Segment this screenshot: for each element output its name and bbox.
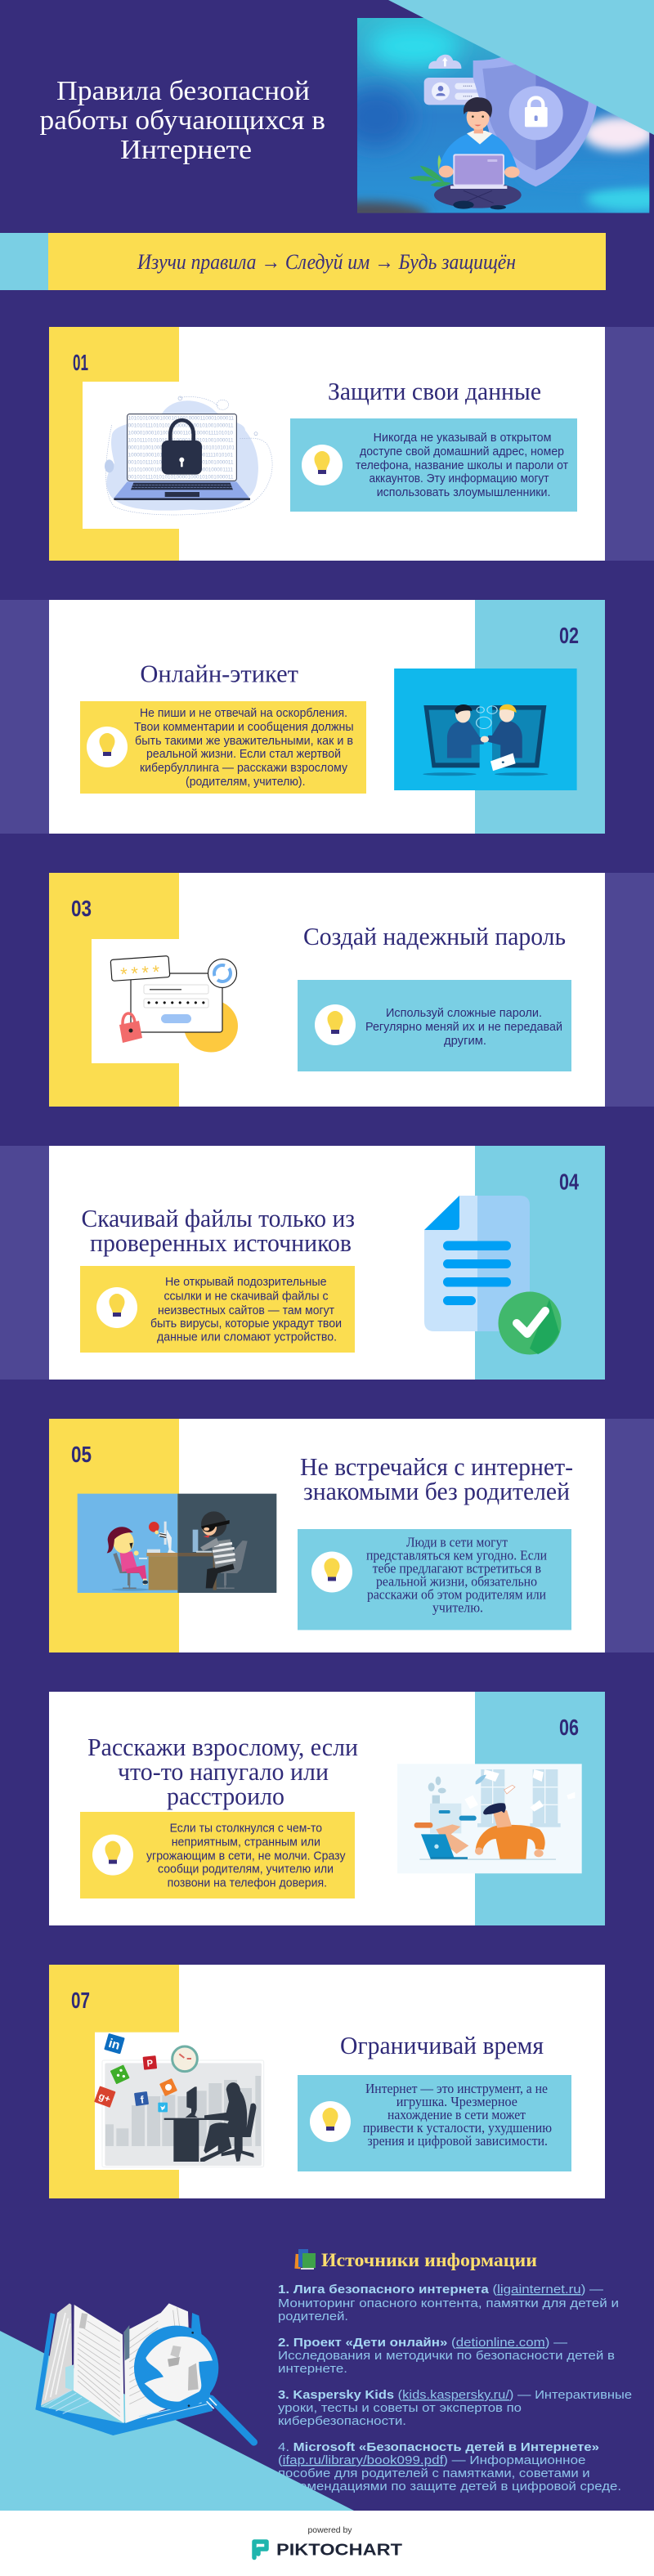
powered by text: powered by: [307, 2525, 352, 2535]
panel 3: strong password: [49, 873, 654, 1107]
footer: [0, 2511, 654, 2576]
tip text: [134, 706, 354, 789]
number 03: 03: [71, 896, 92, 921]
tip text: кибербуллинга — расскажи взрослому: [140, 761, 347, 775]
tip text: другим.: [444, 1034, 486, 1048]
tip text: данные или сломают устройство.: [157, 1330, 337, 1344]
tip text: позвони на телефон доверия.: [168, 1876, 327, 1890]
number 02: 02: [559, 623, 579, 648]
sources text: [278, 2283, 632, 2493]
icon: light bulb: [310, 2101, 351, 2142]
tip text: [356, 431, 568, 499]
heading: [300, 1452, 573, 1505]
Piktochart wordmark: PIKTOCHART: [276, 2542, 402, 2560]
panel 1: protect your data: [49, 327, 654, 561]
illustration: laptop with padlock: 1010101000010001010010000110001000011: [128, 416, 234, 422]
icon: light bulb: [315, 1004, 356, 1045]
tip text: [150, 1275, 342, 1344]
sources text: родителей.: [278, 2310, 348, 2323]
bottom left triangle: [0, 2331, 354, 2511]
icon: cloud: [428, 55, 461, 69]
panel 5: do not meet strangers: [49, 1419, 654, 1652]
tip box: [290, 418, 577, 512]
heading: [82, 1204, 355, 1257]
desk silhouette: [164, 2082, 256, 2162]
icon: shield: [473, 56, 597, 186]
tip text: неприятным, странным или: [172, 1836, 320, 1849]
tip text: расскажи об этом родителям или: [367, 1587, 546, 1602]
tip text: быть вирусы, которые украдут твои: [150, 1317, 342, 1330]
heading: Скачивай файлы только из: [82, 1204, 355, 1232]
heading: Ограничивай время: [340, 2031, 544, 2059]
icon: light bulb: [96, 1287, 137, 1328]
number 06: 06: [559, 1715, 579, 1740]
illustration: laptop with padlock: 1010111010101010100001000101001000011: [128, 438, 234, 444]
sources text: пособие для родителей с памятками, советами и: [278, 2466, 590, 2480]
hero title: Правила безопасной: [56, 76, 310, 106]
icon: light bulb: [87, 727, 128, 767]
sources text: интернете.: [278, 2362, 347, 2376]
hero illustration: boy with laptop and shield: [357, 18, 649, 213]
tip text: тебе предлагают встретиться в: [373, 1561, 541, 1576]
tagline banner: [0, 233, 606, 290]
heading: что-то напугало или: [118, 1757, 329, 1786]
tip text: Люди в сети могут: [406, 1535, 508, 1550]
heading: Не встречайся с интернет-: [300, 1452, 573, 1481]
illustration: password form: [110, 956, 238, 1053]
tip text: нахождение в сети может: [387, 2107, 526, 2122]
tip text: ссылки и не скачивай файлы с: [164, 1290, 329, 1303]
social media icons: P: [146, 2059, 154, 2069]
number 04: 04: [559, 1169, 579, 1195]
icon: document with check mark: [424, 1196, 561, 1355]
tip text: Не открывай подозрительные: [165, 1275, 327, 1289]
sources text: 2. Проект «Дети онлайн» (detionline.com ) —: [278, 2336, 567, 2350]
tip text: сообщи родителям, учителю или: [158, 1863, 334, 1876]
heading: Онлайн-этикет: [140, 659, 298, 688]
login card: •••••: [463, 84, 473, 89]
tip text: (родителям, учителю).: [186, 775, 306, 789]
icon: Piktochart logo: [254, 2542, 267, 2558]
tip text: [363, 2081, 552, 2149]
illustration: laptop with padlock: [105, 396, 272, 515]
number 01: 01: [73, 350, 88, 375]
panel 4: download files safely: [0, 1146, 605, 1380]
tip text: угрожающим в сети, не молчи. Сразу: [146, 1849, 346, 1863]
icon: stack of books: [294, 2249, 316, 2270]
person: [434, 97, 522, 209]
panel 6: tell an adult: [49, 1692, 605, 1925]
sources text: 4. Microsoft «Безопасность детей в Интернете»: [278, 2440, 599, 2454]
illustration: password form: ****: [120, 961, 161, 985]
tip text: Никогда не указывай в открытом: [374, 431, 551, 445]
tip box: [80, 1812, 355, 1898]
hero title: [39, 76, 325, 165]
tip text: привести к усталости, ухудшению: [363, 2120, 552, 2135]
tip text: неизвестных сайтов — там могут: [158, 1304, 334, 1317]
sources heading: Источники информации: [321, 2250, 537, 2270]
login card: •••••: [463, 94, 473, 99]
icon: light bulb: [92, 1835, 133, 1876]
tip text: быть такими же уважительными, как и в: [135, 734, 353, 748]
tip text: доступе свой домашний адрес, номер: [360, 445, 564, 458]
tip text: Используй сложные пароли.: [386, 1006, 542, 1020]
sources text: кибербезопасности.: [278, 2414, 406, 2428]
tip text: Если ты столкнулся с чем-то: [170, 1821, 322, 1836]
tip text: представляться кем угодно. Если: [366, 1548, 547, 1563]
illustration: person at desk with social icons: [94, 2033, 264, 2170]
heading: Защити свои данные: [328, 377, 541, 405]
tip text: [365, 1006, 562, 1048]
hero title: работы обучающихся в: [39, 105, 325, 136]
tip box: [298, 980, 571, 1071]
illustration: girl and disguised stranger: [78, 1494, 276, 1593]
sources text: Мониторинг опасного контента, памятки для детей и: [278, 2296, 619, 2310]
tip box: [80, 701, 366, 794]
top right triangle: [388, 0, 654, 135]
tip text: использовать злоумышленники.: [377, 485, 551, 499]
tip text: реальной жизни, обязательно: [376, 1574, 537, 1589]
social media icons: in: [107, 2037, 122, 2053]
tip box: [298, 2075, 571, 2171]
sources text: уроки, тесты и советы от экспертов по: [278, 2401, 522, 2415]
icon: plant: [409, 154, 451, 186]
sources text: Исследования и методички по безопасности детей в: [278, 2349, 615, 2363]
clock: [172, 2046, 197, 2072]
sources text: (ifap.ru/library/book099.pdf ) — Информационное: [278, 2453, 586, 2467]
illustration: password form: ••••••••: [147, 997, 205, 1008]
sources text: рекомендациями по защите детей в цифровой среде.: [278, 2480, 621, 2493]
heading: знакомыми без родителей: [303, 1477, 570, 1505]
tip box: [80, 1266, 355, 1353]
tip box: [298, 1529, 571, 1630]
tip text: Интернет — это инструмент, а не: [365, 2081, 548, 2096]
number 07: 07: [71, 1988, 90, 2013]
illustration: laptop with padlock: 1000010001010010000110000001111010101: [128, 453, 233, 458]
tip text: учителю.: [432, 1600, 483, 1615]
heading: [87, 1733, 358, 1810]
heading: Расскажи взрослому, если: [87, 1733, 358, 1761]
tip text: зрения и цифровой зависимости.: [368, 2133, 548, 2149]
number 05: 05: [71, 1442, 92, 1467]
illustration: laptop with padlock: 0010101110101010100001000101001000011: [128, 423, 234, 429]
illustration: laptop with padlock: 0001010010001010101010101010101010101: [128, 445, 235, 451]
tip text: [366, 1535, 547, 1615]
illustration: laptop with padlock: 1010100001000101001000011000100001111: [128, 467, 233, 473]
illustration: laptop with padlock: 1000010001010010000110010000111101010: [128, 431, 233, 436]
heading: проверенных источников: [90, 1228, 352, 1257]
illustration: upset boy and laptop: [397, 1764, 582, 1873]
illustration: handshake from tablets: [394, 669, 577, 790]
tip text: Регулярно меняй их и не передавай: [365, 1020, 562, 1034]
panel 2: online etiquette: [0, 600, 605, 834]
illustration: laptop with padlock: 0010101110101010100001000101001000011: [128, 475, 234, 481]
hero title: Интернете: [120, 135, 252, 165]
tip text: телефона, название школы и пароли от: [356, 458, 568, 472]
tip text: Не пиши и не отвечай на оскорбления.: [140, 706, 347, 720]
sources text: 3. Kaspersky Kids (kids.kaspersky.ru/ ) — Интерактивные: [278, 2388, 632, 2402]
panel 7: limit your time: [49, 1965, 605, 2198]
tip text: игрушка. Чрезмерное: [396, 2094, 517, 2109]
icon: light bulb: [311, 1551, 352, 1592]
tip text: Твои комментарии и сообщения должны: [134, 720, 354, 734]
social media icons: [94, 2033, 177, 2112]
icon: arrow in cloud: [442, 57, 448, 66]
tip text: аккаунтов. Эту информацию могут: [370, 472, 549, 485]
illustration: laptop with padlock: 0010101110101010100001000101001000011: [128, 460, 234, 466]
tip text: [146, 1821, 346, 1890]
tip text: реальной жизни. Если стал жертвой: [146, 747, 341, 761]
social media icons: g+: [97, 2091, 112, 2105]
icon: light bulb: [302, 445, 343, 485]
sources text: 1. Лига безопасного интернета (ligainternet.ru ) —: [278, 2283, 603, 2296]
heading: Создай надежный пароль: [303, 922, 566, 950]
illustration: open book with magnifier: [35, 2303, 254, 2442]
social media icons: f: [140, 2094, 146, 2106]
heading: расстроило: [167, 1782, 284, 1810]
tagline text: Изучи правила → Следуй им → Будь защищён: [137, 250, 516, 274]
login card: [424, 78, 496, 105]
